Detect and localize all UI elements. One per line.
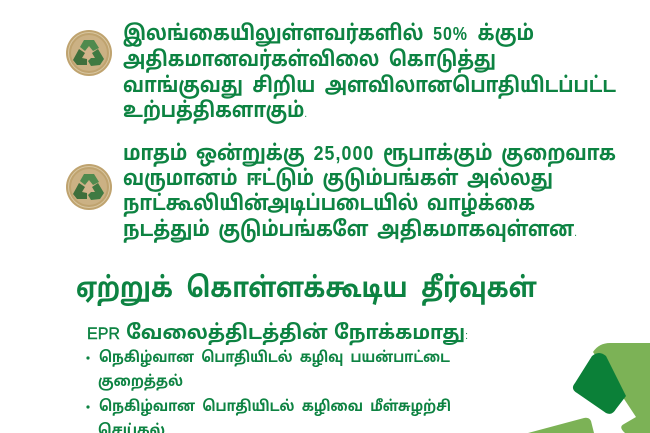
heading: acceptable solutions: ஏற்றுக் கொள்ளக்கூடிய தீர்வுகள்: [76, 272, 537, 306]
icon: recycling badge 1: [66, 30, 112, 76]
text block: first statement: இலங்கையிலுள்ளவர்களில் 50% க்கும்: [123, 22, 534, 47]
bullet list: நெகிழ்வான பொதியிடல் கழிவை மீள்சுழற்சி: [99, 397, 451, 416]
text block: first statement: அதிகமானவர்கள்விலை கொடுத்து: [123, 48, 496, 73]
icon: recycling badge 2: [66, 164, 112, 210]
bullet list: நெகிழ்வான பொதியிடல் கழிவு பயன்பாட்டை: [99, 349, 450, 367]
text block: second statement: மாதம் ஒன்றுக்கு 25,000 ரூபாக்கும் குறைவாக: [123, 142, 616, 167]
text block: second statement: வருமானம் ஈட்டும் குடும்பங்கள் அல்லது: [123, 167, 553, 192]
text block: first statement: உற்பத்திகளாகும்.: [123, 99, 307, 124]
text block: second statement: நாட்கூலியின்அடிப்படையில் வாழ்க்கை: [123, 192, 535, 217]
text block: second statement: [123, 142, 616, 243]
graphic: corner recycling symbol: [528, 343, 650, 433]
text block: first statement: [123, 22, 616, 124]
bullet list: [86, 349, 451, 433]
subheading: EPR programme aim: EPR வேலைத்திடத்தின் நோக்கமாது:: [87, 321, 468, 346]
text block: second statement: நடத்தும் குடும்பங்களே அதிகமாகவுள்ளன.: [123, 217, 577, 243]
bullet list: குறைத்தல்: [98, 373, 183, 391]
